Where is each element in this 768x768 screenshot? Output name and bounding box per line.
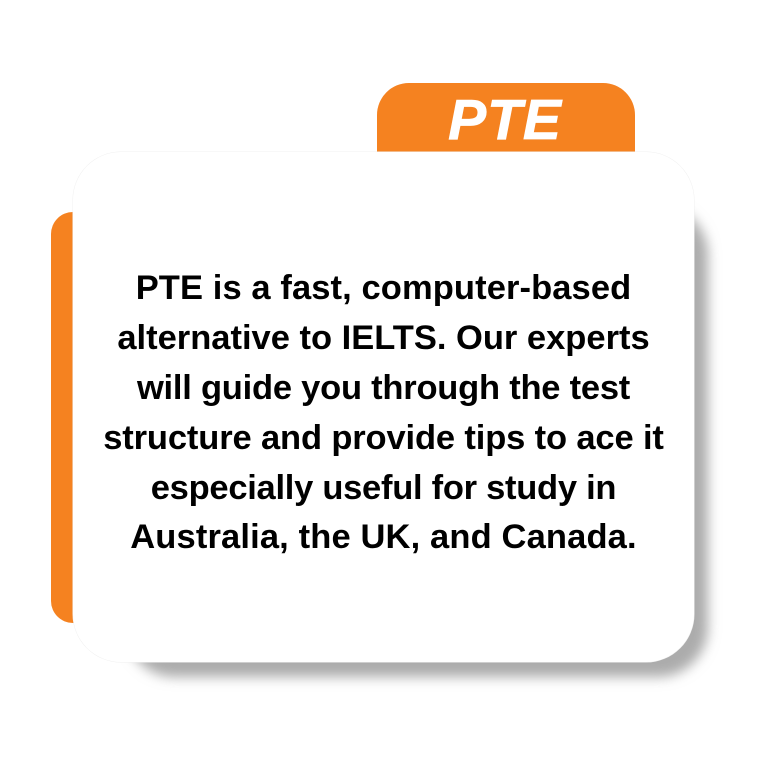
body text: Australia, the UK, and Canada. bbox=[130, 518, 637, 556]
white card bbox=[73, 152, 694, 662]
orange tab bbox=[377, 83, 635, 173]
body text: PTE is a fast, computer-based bbox=[136, 269, 631, 307]
orange left bar bbox=[51, 212, 111, 623]
body text: will guide you through the test bbox=[137, 369, 630, 407]
body text: structure and provide tips to ace it bbox=[103, 419, 664, 457]
body text: alternative to IELTS. Our experts bbox=[117, 319, 650, 357]
body text bbox=[103, 269, 664, 556]
tab heading: PTE bbox=[448, 88, 562, 152]
body text: especially useful for study in bbox=[151, 469, 616, 507]
